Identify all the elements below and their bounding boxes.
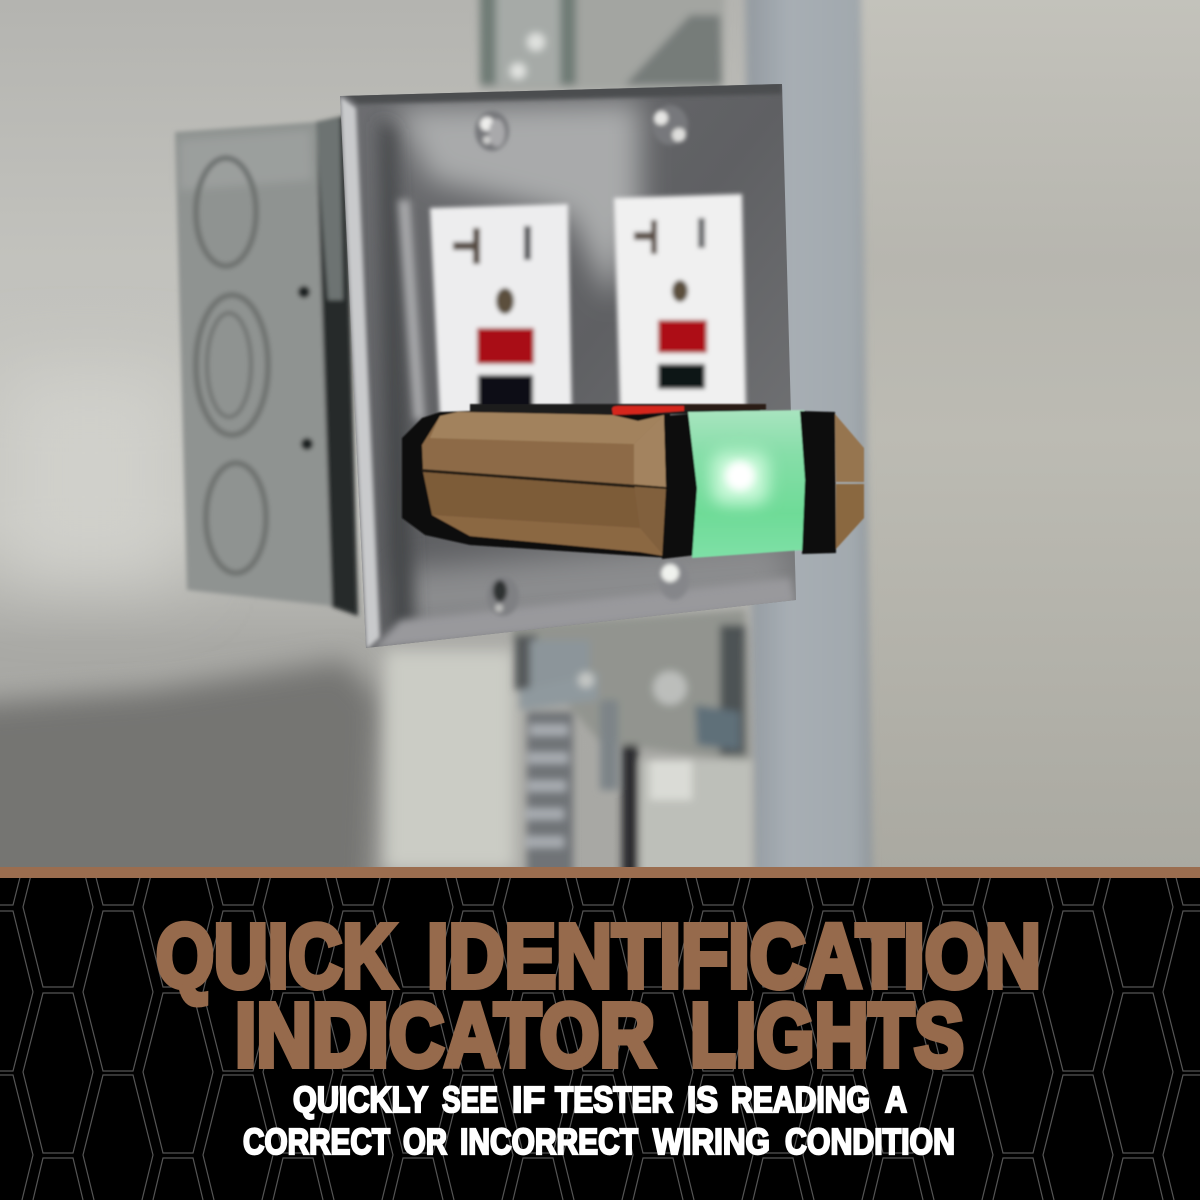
tester tan upper body bbox=[422, 412, 666, 487]
title: INDICATOR bbox=[235, 986, 655, 1086]
subtitle: CORRECT bbox=[243, 1121, 390, 1162]
subtitle: WIRING bbox=[653, 1121, 770, 1162]
subtitle: CONDITION bbox=[785, 1121, 955, 1162]
screw: bottom right bbox=[659, 560, 689, 600]
photo: wall background bbox=[0, 0, 1200, 900]
tester tan lower body bbox=[423, 472, 666, 556]
subtitle bbox=[243, 1079, 955, 1162]
subtitle: SEE bbox=[442, 1079, 498, 1120]
photo: metal strut bbox=[745, 0, 873, 910]
tester green window bbox=[688, 410, 805, 558]
subtitle: OR bbox=[403, 1121, 447, 1162]
photo: top bracket hardware bbox=[478, 0, 725, 90]
screw: top left bbox=[475, 111, 509, 151]
tester black band right bbox=[800, 411, 836, 554]
photo: left GFCI outlet bbox=[430, 204, 572, 420]
banner black panel with hexagon pattern bbox=[0, 878, 1200, 1200]
screw: top right bbox=[652, 105, 688, 145]
banner copper rule bbox=[0, 867, 1200, 878]
title bbox=[156, 907, 1041, 1086]
title: LIGHTS bbox=[690, 986, 964, 1086]
subtitle: TESTER bbox=[555, 1079, 673, 1120]
title: QUICK bbox=[156, 907, 396, 1007]
photo: circuit tester with green light bbox=[402, 404, 864, 559]
subtitle: READING bbox=[731, 1079, 870, 1120]
photo: steel wall plate with screws bbox=[340, 80, 796, 650]
subtitle: A bbox=[885, 1079, 907, 1120]
subtitle: INCORRECT bbox=[460, 1121, 638, 1162]
photo: right GFCI outlet bbox=[614, 194, 746, 410]
tester black band left bbox=[662, 414, 697, 559]
photo: junction box bbox=[175, 116, 358, 616]
screw: bottom left bbox=[487, 576, 519, 616]
flexible conduit bbox=[526, 712, 573, 890]
tester tan end cap bbox=[835, 414, 864, 482]
subtitle: IS bbox=[687, 1079, 718, 1120]
photo: lower conduit and hardware bbox=[512, 610, 752, 890]
subtitle: QUICKLY bbox=[293, 1079, 428, 1120]
subtitle: IF bbox=[512, 1079, 545, 1120]
title: IDENTIFICATION bbox=[427, 907, 1041, 1007]
photo scene bbox=[0, 0, 1200, 910]
